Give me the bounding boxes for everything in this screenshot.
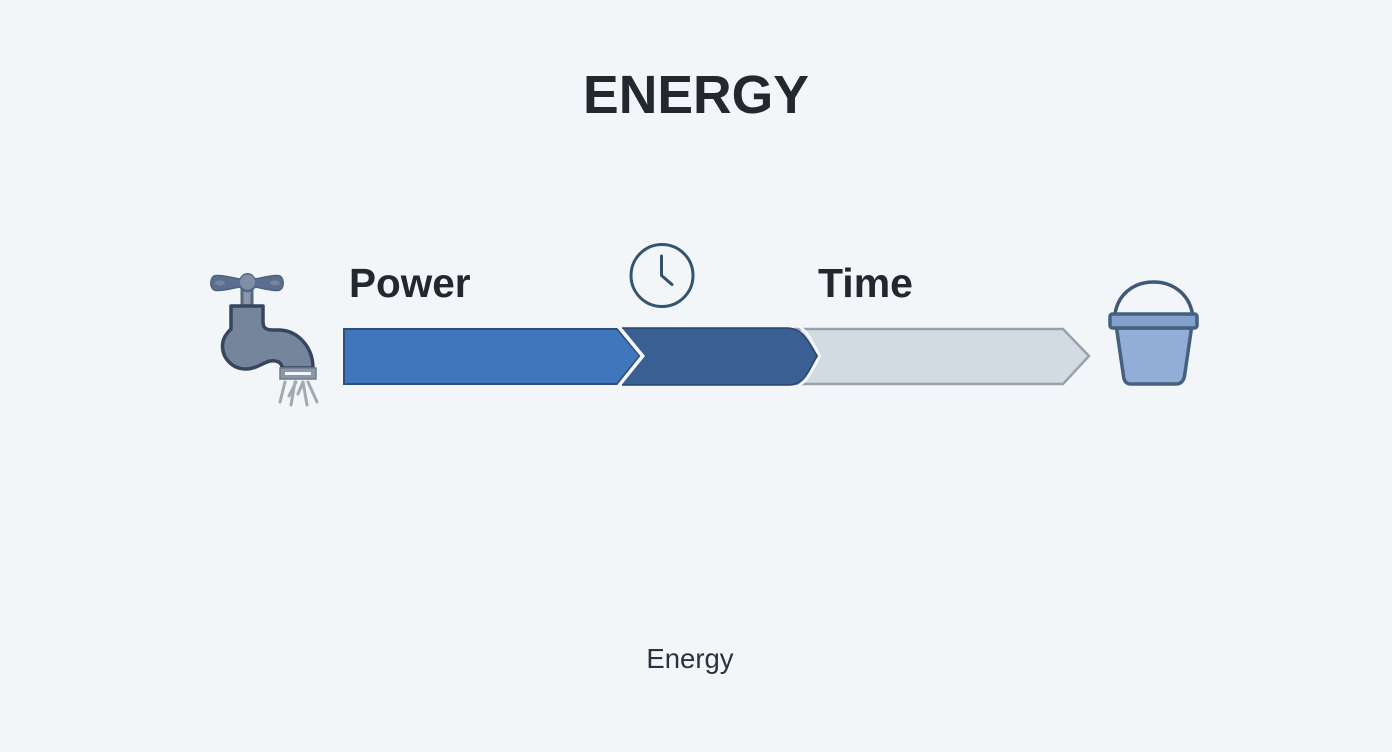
icon: faucet [211, 274, 317, 405]
icon: clock [631, 244, 693, 306]
icon: bucket [1110, 282, 1197, 384]
arrow: energy bar [344, 326, 1089, 386]
title: ENERGY [583, 66, 809, 125]
label: Time: Time [818, 260, 913, 306]
segment: overlap of power and time [622, 328, 817, 384]
segment: power [344, 329, 640, 384]
caption: Energy [646, 643, 734, 674]
segment: time remainder [797, 329, 1089, 384]
label: Power: Power [349, 260, 471, 306]
